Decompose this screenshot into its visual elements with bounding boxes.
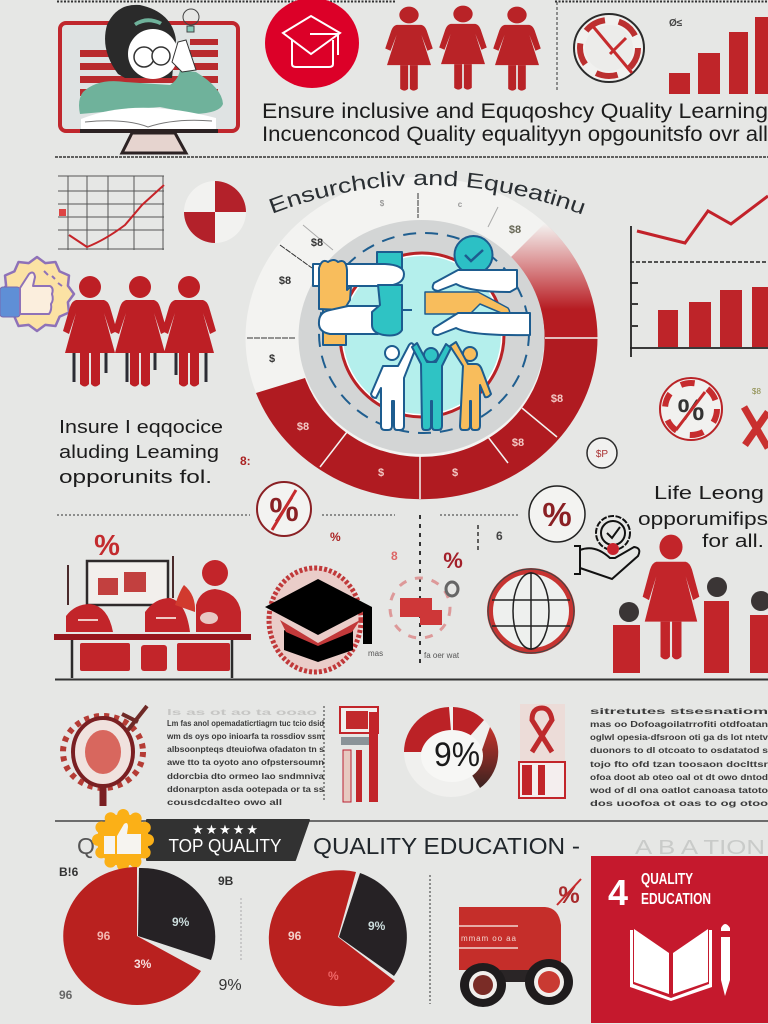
headline	[262, 100, 768, 146]
text block: left paragraph: ddonarpton asda ootepada or ta ss	[167, 785, 325, 794]
headline: Incuenconcod Quality equalityyn opgounitsfo ovr all	[262, 123, 768, 146]
globe	[488, 569, 574, 653]
percent circle lower left: %	[269, 491, 299, 528]
left text block: Insure I eqqocice	[59, 417, 223, 437]
axes	[630, 226, 768, 357]
segment labels: $	[380, 199, 385, 208]
ring base	[246, 177, 598, 499]
donut chart	[246, 177, 598, 499]
central cluster icons	[368, 548, 463, 660]
icon: check badge	[454, 236, 492, 274]
text block: left paragraph: ls as ot ao ta ooao	[167, 708, 317, 717]
monitor	[60, 23, 238, 153]
central cluster icons: mas	[368, 649, 383, 658]
pie chart 2	[269, 870, 407, 1006]
text block: right paragraph: dos uoofoa ot oas to og otoo	[590, 799, 768, 808]
icon: clock dial	[574, 14, 644, 82]
text block: left paragraph: cousdcdalteo owo all	[167, 798, 282, 807]
top quality banner	[97, 814, 309, 866]
label: QUALITY	[641, 871, 693, 888]
classroom illustration	[54, 530, 251, 678]
dashed ring	[319, 233, 529, 433]
small badge circle: $P	[596, 449, 608, 460]
icon: pencil	[721, 924, 730, 996]
heading: quality education: Q	[77, 833, 95, 859]
right text block: for all.	[702, 531, 764, 551]
thumbs-up badge left	[0, 257, 74, 331]
pie chart 1: 96	[97, 929, 111, 943]
line chart grid top left	[58, 176, 164, 250]
icon: red circle graduation cap	[265, 0, 359, 88]
icon: bottle and tubes	[340, 707, 378, 802]
heads	[619, 577, 768, 622]
text block: right paragraph: sitretutes stsesnatiom	[590, 707, 768, 716]
pie chart 1: 9B	[218, 874, 234, 888]
right text block: opporumifips	[638, 509, 768, 529]
SDG 4 quality education tile: EDUCATION	[641, 891, 711, 908]
text block: right paragraph: duonors to dl otcoato to osdatatod s	[590, 746, 768, 755]
woman and bars right	[613, 535, 768, 673]
person	[79, 5, 223, 129]
three women holding hands	[63, 276, 216, 386]
left text block: opporunits fol.	[59, 467, 212, 487]
percent symbol: %	[94, 530, 120, 562]
pie chart 1	[59, 865, 242, 1005]
trend line	[637, 196, 768, 243]
text block: right paragraph: wod of dl ona oatlot canoasa tatoto	[589, 786, 768, 795]
percent circle lower left	[257, 482, 311, 536]
pie chart 2: %	[328, 969, 339, 983]
segment labels: $8	[297, 421, 309, 433]
pie chart 2: 96	[288, 929, 302, 943]
central cluster icons: %	[443, 548, 463, 573]
icon: three people	[371, 342, 491, 430]
text block: left paragraph: ddorcbia dto ormeo lao sndmniva	[167, 772, 325, 781]
text block: right paragraph	[589, 707, 768, 808]
table	[54, 634, 251, 640]
pie chart 1: 3%	[134, 957, 152, 971]
bars	[658, 287, 768, 347]
woman	[643, 535, 699, 659]
heading: quality education	[77, 833, 765, 859]
red cross: $8	[752, 387, 761, 396]
pie chart 1: 9%	[218, 977, 242, 994]
illustration: teacher at monitor with book	[60, 5, 238, 153]
heading: quality education: A B A TION	[635, 837, 765, 859]
small labels middle: 6	[496, 529, 503, 543]
icon: hands right	[425, 270, 530, 335]
segment labels	[269, 199, 563, 479]
heading: quality education: QUALITY EDUCATION -	[313, 833, 580, 859]
icon: joined hands left	[313, 252, 412, 345]
text block: left paragraph: wm ds oys opo inioarfa ta rossdiov ssm	[166, 732, 324, 741]
curved heading: Ensurchcliv and Equeatinu	[269, 170, 585, 214]
text block: right paragraph: mas oo Dofoagoilatrrofiti otdfoatan	[590, 720, 768, 729]
small labels middle: 8	[391, 549, 398, 563]
red segments	[256, 338, 598, 499]
segment labels: $8	[551, 393, 563, 405]
SDG 4 quality education tile	[591, 856, 768, 1023]
percent circle lower right: %	[542, 496, 572, 533]
percent circle with ring: %	[678, 394, 704, 427]
quartered pie	[184, 181, 246, 243]
small labels middle: %	[330, 530, 341, 544]
line and bar chart right	[630, 196, 768, 357]
right text block	[638, 483, 768, 551]
segment labels: $8	[512, 437, 524, 449]
label: TOP QUALITY	[168, 836, 282, 856]
fading segment	[510, 223, 598, 338]
small labels middle	[240, 454, 503, 563]
laurel emblem	[63, 706, 147, 806]
graduation cap with laurel	[265, 568, 372, 672]
seated figures	[66, 560, 241, 632]
right text block: Life Leong	[654, 483, 764, 503]
grey band	[298, 220, 544, 454]
text block: left paragraph: Lm fas anol opemadaticrtiagrn tuc tcio dsid	[167, 719, 324, 728]
segment labels: $8	[279, 275, 291, 287]
segment labels: $	[452, 467, 458, 479]
text block: right paragraph: oglwl opesia-dfsroon oti ga ds lot ntetv	[590, 733, 768, 742]
segment labels: c	[458, 200, 463, 209]
central cluster icons: fa oer wat	[424, 651, 460, 660]
icon: ribbon panel	[519, 704, 565, 798]
donut with 9%: 9%	[434, 736, 480, 774]
text block: left paragraph: albsoonpteqs dteuiofwa ofadaton tn s	[167, 745, 325, 754]
text block: right paragraph: ofoa doot ab oteo oal ot dt owo dntod	[590, 773, 768, 782]
text block: left paragraph	[166, 708, 325, 807]
segment labels: $	[378, 467, 384, 479]
small badge circle	[587, 438, 617, 468]
text block: right paragraph: tojo fto ofd tzan toosaon doclttsr	[590, 760, 768, 769]
bar chart top right	[669, 17, 768, 94]
pie chart 1: 9%	[172, 915, 190, 929]
table boxes	[80, 643, 230, 671]
segment labels: $8	[311, 237, 323, 249]
three women icons top	[385, 6, 541, 91]
segment labels: $	[269, 353, 275, 365]
label: Ø≤	[669, 18, 683, 29]
donut with 9%	[404, 707, 498, 797]
percent circle with ring	[660, 378, 722, 440]
pie chart 1: B!6	[59, 865, 79, 879]
ring dividers	[320, 338, 598, 499]
bars	[669, 17, 768, 94]
number: 4	[608, 872, 628, 913]
icon: light bulb	[183, 9, 199, 32]
icon: thumbs up	[97, 814, 149, 866]
pie chart 2: 9%	[368, 919, 386, 933]
banner shape	[147, 820, 309, 860]
inner red ring and teal disc	[340, 253, 504, 417]
headline: Ensure inclusive and Equqoshcy Quality Learning	[262, 100, 768, 123]
percent mark: %	[558, 882, 580, 909]
pie chart 1: 96	[59, 988, 73, 1002]
small labels middle: 8:	[240, 454, 251, 468]
stars: ★★★★★	[192, 822, 258, 837]
percent circle lower right	[529, 486, 585, 542]
text block: left paragraph: awe tto ta oyoto ano ofpstersoumn	[167, 758, 324, 767]
bars	[613, 601, 768, 673]
left text block	[59, 417, 223, 487]
board	[68, 556, 173, 605]
delivery truck: mmam oo aa	[461, 934, 517, 943]
icon: open book	[630, 929, 712, 1001]
delivery truck	[459, 907, 573, 1007]
red cross	[744, 387, 768, 448]
left text block: aluding Leaming	[59, 442, 219, 462]
icon: hand with badge	[574, 516, 639, 579]
segment labels: $8	[509, 224, 521, 236]
